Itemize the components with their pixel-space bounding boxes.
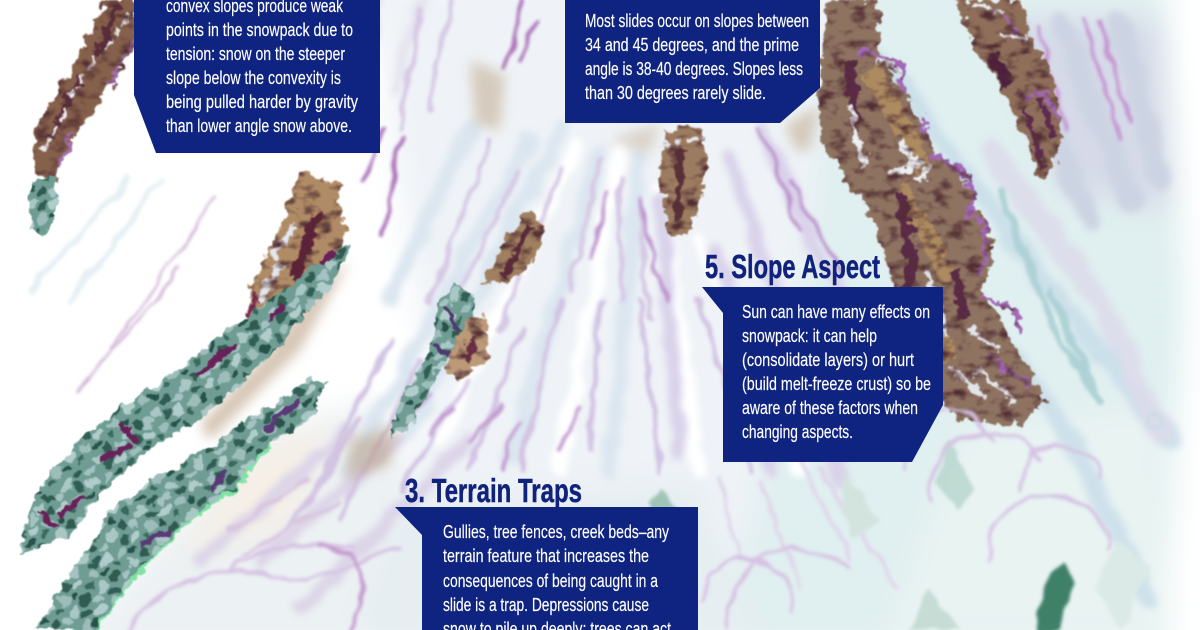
callout: slope aspect: (build melt-freeze crust) so be (742, 373, 931, 394)
swirling powder cloud arcs (130, 410, 1159, 630)
foliage: main tree band (22, 242, 350, 555)
callout: slope aspect: changing aspects. (742, 421, 853, 442)
heading: 3. Terrain Traps: 3. Terrain Traps (405, 472, 582, 509)
tan washes (200, 60, 820, 480)
callout: factor 2, convex slopes: than lower angle snow above. (166, 115, 352, 136)
callout: slope aspect: aware of these factors when (742, 397, 918, 418)
foliage: lower right evergreens (650, 440, 1150, 630)
callout: slope aspect: Sun can have many effects on (742, 301, 930, 322)
callout: slope angle: 34 and 45 degrees, and the prime (585, 34, 799, 55)
callout: factor 2, convex slopes: slope below the convexity is (166, 67, 341, 88)
rock outcrop: centre (485, 128, 706, 285)
callout: factor 2, convex slopes: being pulled harder by gravity (166, 91, 359, 112)
callout: slope aspect (702, 287, 943, 462)
rock ridge: upper left (35, 0, 138, 180)
rock ridge: centre left (248, 170, 345, 325)
callout: slope angle: Most slides occur on slopes between (585, 10, 809, 31)
callout: factor 2, convex slopes: points in the snowpack due to (166, 19, 353, 40)
foliage: small tree band (392, 285, 475, 440)
callout: factor 2, convex slopes: tension: snow on the steeper (166, 43, 345, 64)
callout: terrain traps: Gullies, tree fences, creek beds–any (443, 521, 670, 542)
foliage: upper left trees (30, 175, 60, 240)
rock ridge: upper right (955, 0, 1062, 180)
rock ridge: big right (818, 0, 1045, 425)
heading: 5. Slope Aspect: 5. Slope Aspect (705, 248, 880, 285)
callout: factor 2, convex slopes (134, 0, 380, 153)
callout: slope angle: than 30 degrees rarely slide. (585, 82, 766, 103)
callout: slope aspect: (consolidate layers) or hurt (742, 349, 914, 370)
rock outcrop: beside small trees (445, 315, 490, 380)
callout: slope aspect: snowpack: it can help (742, 325, 877, 346)
broad soft snow streaks (200, 0, 1170, 610)
callout: terrain traps: terrain feature that increases the (443, 545, 649, 566)
foliage: lower tree band (35, 375, 325, 630)
callout: terrain traps: consequences of being caught in a (443, 570, 659, 591)
callout: terrain traps: slide is a trap. Depressions cause (443, 594, 649, 615)
callout: slope angle: angle is 38-40 degrees. Slopes less (585, 58, 803, 79)
callout: terrain traps (395, 507, 698, 630)
callout: slope angle (565, 0, 820, 123)
